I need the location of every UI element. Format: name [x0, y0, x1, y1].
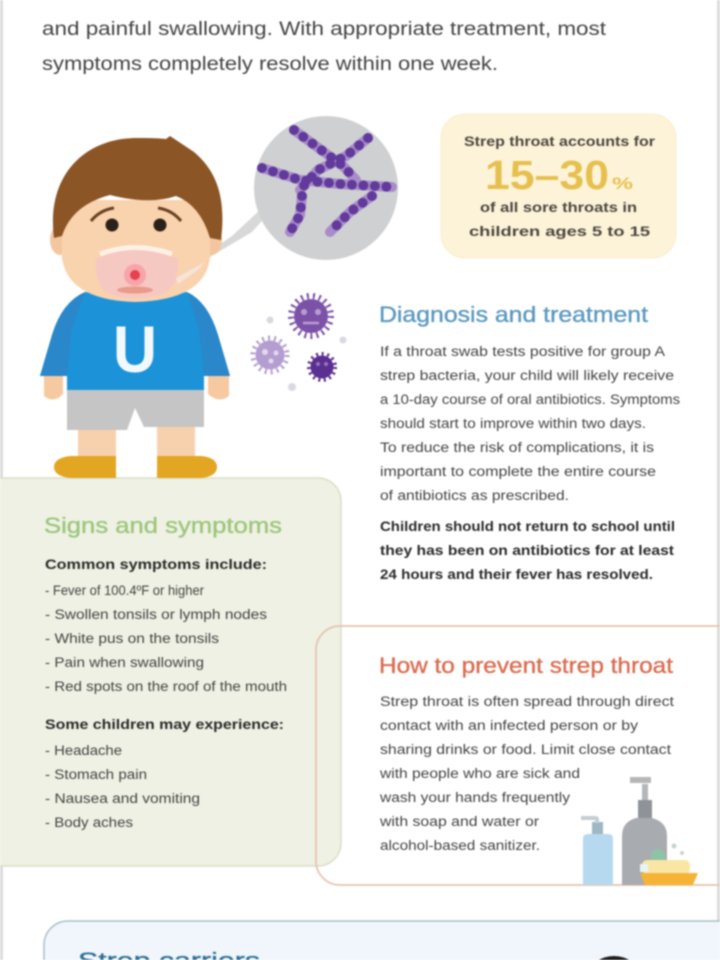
additional symptoms list — [45, 717, 284, 830]
legs — [78, 425, 195, 463]
diagnosis text: If a throat swab tests positive for group A — [380, 344, 665, 359]
common symptoms list: Common symptoms include: — [45, 557, 267, 572]
open mouth with sore throat — [96, 248, 205, 298]
icon: soap bottles and dish — [581, 777, 698, 885]
icon: figure head — [590, 956, 638, 960]
prevention text: alcohol-based sanitizer. — [380, 838, 540, 853]
callout: strep throat statistic: of all sore throats in — [480, 199, 637, 215]
common symptoms list: - Red spots on the roof of the mouth — [45, 679, 287, 694]
prevention text: with people who are sick and — [379, 766, 580, 781]
ears — [50, 225, 222, 255]
hair — [53, 136, 222, 240]
school return note: Children should not return to school until — [380, 519, 675, 534]
common symptoms list: - White pus on the tonsils — [45, 631, 219, 646]
panel: strep carriers — [44, 921, 720, 960]
big number: 15–30 — [485, 152, 609, 198]
icon: sick boy illustration — [40, 136, 230, 478]
heading: how to prevent: How to prevent strep throat — [379, 653, 673, 678]
common symptoms list: - Swollen tonsils or lymph nodes — [45, 607, 267, 622]
prevention text: sharing drinks or food. Limit close contact — [380, 742, 671, 757]
additional symptoms list: - Body aches — [45, 815, 133, 830]
prevention text — [379, 694, 674, 853]
panel: how to prevent strep throat — [316, 626, 720, 885]
additional symptoms list: - Nausea and vomiting — [45, 791, 200, 806]
common symptoms list: - Pain when swallowing — [45, 655, 204, 670]
big number: % — [612, 174, 633, 193]
panel: signs and symptoms — [0, 478, 341, 866]
school return note — [380, 519, 675, 582]
additional symptoms list: Some children may experience: — [45, 717, 284, 732]
intro text block: and painful swallowing. With appropriate treatment, most — [42, 19, 607, 40]
diagnosis text: important to complete the entire course — [380, 464, 656, 479]
diagnosis text: of antibiotics as prescribed. — [380, 488, 569, 503]
diagnosis text: strep bacteria, your child will likely receive — [380, 368, 674, 383]
diagnosis text: should start to improve within two days. — [380, 416, 646, 431]
callout: strep throat statistic: children ages 5 to 15 — [469, 223, 650, 239]
school return note: 24 hours and their fever has resolved. — [380, 567, 653, 582]
additional symptoms list: - Headache — [45, 743, 122, 758]
common symptoms list: - Fever of 100.4ºF or higher — [45, 583, 204, 598]
prevention text: contact with an infected person or by — [380, 718, 638, 733]
diagnosis text: a 10-day course of oral antibiotics. Symptoms — [380, 392, 680, 407]
intro text block — [42, 0, 662, 75]
diagnosis text — [380, 344, 680, 503]
prevention text: Strep throat is often spread through direct — [380, 694, 674, 709]
callout: strep throat statistic — [441, 114, 676, 258]
school return note: they has been on antibiotics for at least — [380, 543, 675, 558]
heading: diagnosis: Diagnosis and treatment — [379, 302, 648, 327]
panel: diagnosis and treatment — [379, 302, 680, 582]
eyes and brows — [91, 208, 181, 232]
intro text block: symptoms completely resolve within one week. — [42, 54, 498, 75]
shoes — [54, 456, 217, 478]
icon: bacteria magnifying bubble — [178, 116, 398, 276]
prevention text: with soap and water or — [379, 814, 540, 829]
heading: signs and symptoms: Signs and symptoms — [44, 513, 282, 538]
shirt letter: U — [113, 312, 157, 386]
additional symptoms list: - Stomach pain — [45, 767, 147, 782]
icon: viruses — [253, 296, 346, 391]
shorts — [67, 388, 204, 430]
common symptoms list — [45, 557, 287, 694]
prevention text: wash your hands frequently — [379, 790, 570, 805]
diagnosis text: To reduce the risk of complications, it is — [380, 440, 654, 455]
callout: strep throat statistic: Strep throat accounts for — [464, 133, 656, 149]
face — [62, 200, 210, 302]
arms — [44, 376, 229, 400]
shirt — [40, 292, 230, 390]
